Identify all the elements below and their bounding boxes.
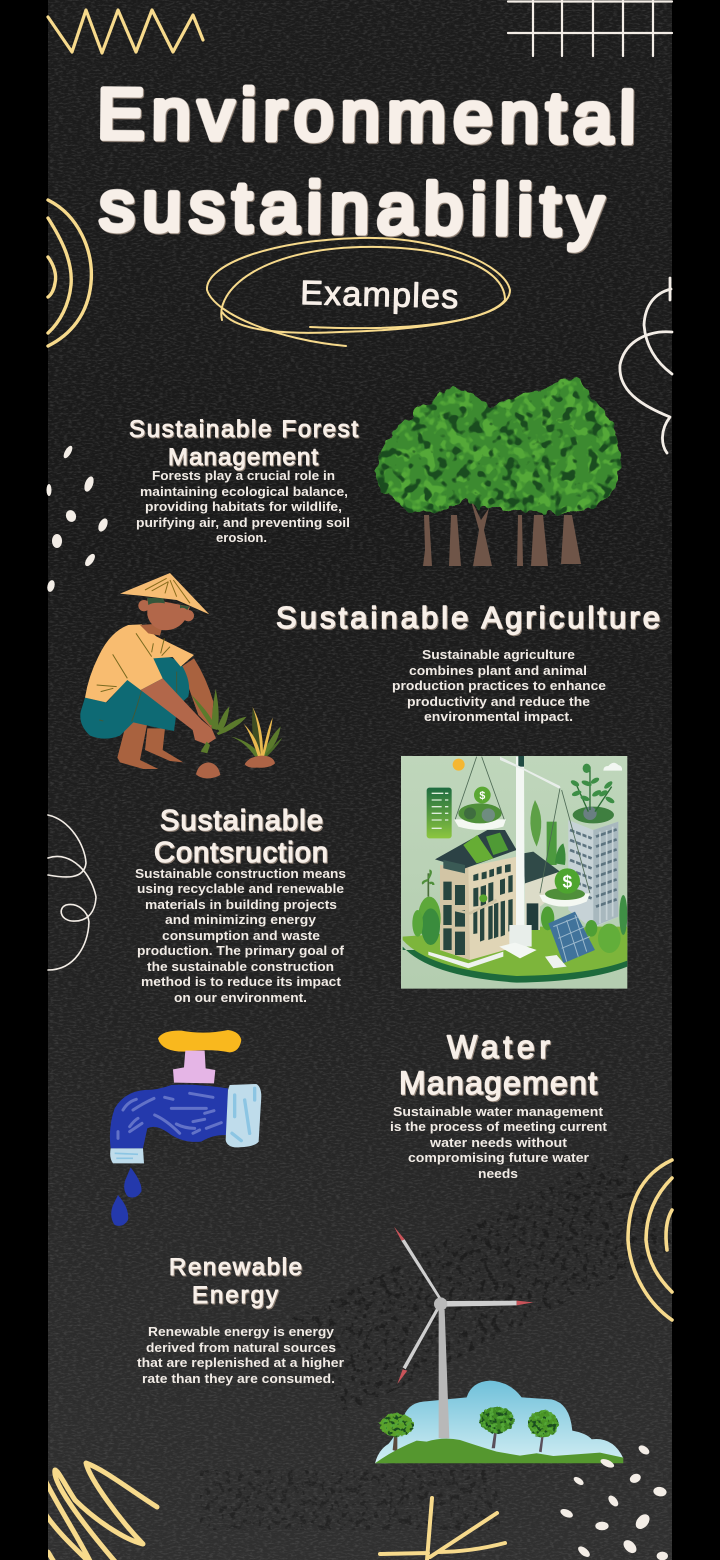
nozzle (110, 1148, 144, 1163)
heading: water: Management (399, 1065, 597, 1101)
big plant (201, 742, 210, 753)
white dots left (46, 444, 110, 593)
white dots bottom right (559, 1444, 668, 1560)
stem (173, 1051, 215, 1083)
legs (117, 722, 158, 769)
text: renewable: derived from natural sources (146, 1340, 336, 1355)
text: construction: consumption and waste (162, 928, 320, 943)
text: forest: providing habitats for wildlife, (145, 499, 342, 514)
text: renewable: that are replenished at a higher (137, 1355, 344, 1370)
text: water: is the process of meeting current (390, 1119, 608, 1134)
text: construction: Sustainable construction means (135, 866, 346, 881)
coupling (226, 1084, 261, 1147)
icon: wind turbine landscape (375, 1227, 623, 1463)
text: agriculture: Sustainable agriculture (422, 647, 575, 662)
text: construction: materials in building projects (145, 897, 337, 912)
doodle: white loops right (620, 278, 672, 453)
heading: construction (154, 805, 328, 869)
doodle: yellow arcs right (628, 1160, 672, 1320)
text: forest: maintaining ecological balance, (140, 484, 348, 499)
right pan: $ (562, 871, 572, 891)
doodle: white grid (508, 0, 672, 56)
small plant and soil (252, 708, 260, 757)
heading: forest: Sustainable Forest (129, 416, 358, 443)
text: agriculture: environmental impact. (424, 709, 573, 724)
subtitle: Examples (300, 274, 459, 316)
title: Environmental (97, 75, 636, 159)
text: construction (135, 866, 346, 1005)
text: agriculture: combines plant and animal (409, 663, 587, 678)
title: sustainability (99, 167, 604, 251)
heading: construction: Sustainable (160, 805, 323, 837)
heading: renewable: Renewable (169, 1254, 302, 1281)
text: construction: the sustainable construction (147, 959, 334, 974)
panel: sustainable forest management (129, 378, 620, 566)
hill (375, 1439, 623, 1463)
far arm (182, 658, 213, 728)
heading: renewable (169, 1254, 302, 1309)
trees and solar panels (412, 871, 627, 968)
text: forest (136, 468, 350, 545)
blades (394, 1227, 533, 1384)
text: water: Sustainable water management (393, 1104, 604, 1119)
text: renewable: rate than they are consumed. (142, 1371, 335, 1386)
main building (435, 830, 517, 960)
back plants (530, 800, 541, 847)
spout (110, 1085, 228, 1148)
tower (568, 820, 618, 928)
icon: forest trees (374, 378, 620, 566)
hat (120, 573, 209, 614)
text: renewable (137, 1324, 344, 1386)
heading: water (399, 1029, 597, 1101)
panel: sustainable agriculture (276, 600, 660, 724)
text: agriculture: productivity and reduce the (407, 694, 590, 709)
heading: forest: Management (168, 444, 318, 471)
near arm (141, 678, 216, 744)
image: sustainable building with balance scale (401, 756, 627, 989)
icon: water faucet (110, 1030, 261, 1226)
text: construction: using recyclable and renewable (137, 881, 344, 896)
text: renewable: Renewable energy is energy (148, 1324, 335, 1339)
back house (523, 852, 560, 885)
left pan (454, 787, 506, 830)
icon: farmer (80, 573, 282, 778)
text: construction: production. The primary goal of (137, 943, 345, 958)
scale pole and beam (455, 756, 590, 958)
handle (158, 1030, 241, 1052)
text: agriculture (392, 647, 606, 724)
text: water: water needs without (429, 1135, 568, 1150)
doodle: white scribble left (48, 815, 96, 970)
scribble oval around subtitle (207, 238, 510, 346)
doodle: yellow star bottom (380, 1498, 505, 1560)
text: construction: on our environment. (174, 990, 307, 1005)
text: forest: purifying air, and preventing soil (136, 515, 350, 530)
text: construction: and minimizing energy (165, 912, 317, 927)
panel: sustainable construction (135, 805, 346, 1005)
heading: construction: Contsruction (154, 837, 328, 869)
title (97, 75, 636, 251)
heading: agriculture: Sustainable Agriculture (276, 600, 660, 635)
sky cloud shape (375, 1381, 623, 1463)
panel: renewable energy (137, 1254, 344, 1386)
trees (379, 1407, 559, 1452)
sun (453, 759, 465, 771)
text: water: compromising future water (408, 1150, 589, 1165)
heading: water: Water (447, 1029, 550, 1065)
text: construction: method is to reduce its impact (141, 974, 342, 989)
tower (439, 1310, 449, 1438)
panel: water management (390, 1029, 608, 1181)
heading: forest (129, 416, 358, 471)
ground platform (403, 947, 627, 983)
text: water (390, 1104, 608, 1181)
right pan (539, 868, 590, 907)
doodle: yellow spiral left (48, 200, 91, 346)
doodle: yellow zigzag (48, 10, 203, 53)
text: forest: erosion. (216, 530, 267, 545)
left pan: $ (479, 790, 485, 802)
drops (124, 1167, 142, 1198)
heading: renewable: Energy (192, 1282, 278, 1309)
shirt (85, 624, 194, 702)
neck and head (140, 623, 163, 636)
text: forest: Forests play a crucial role in (152, 468, 335, 483)
cloud (603, 763, 622, 771)
chart panel (427, 788, 452, 838)
roof garden (570, 764, 615, 823)
text: water: needs (478, 1166, 518, 1181)
text: agriculture: production practices to enhance (392, 678, 606, 693)
doodle: yellow scribble bottom left (46, 1463, 157, 1560)
pants (80, 656, 189, 739)
